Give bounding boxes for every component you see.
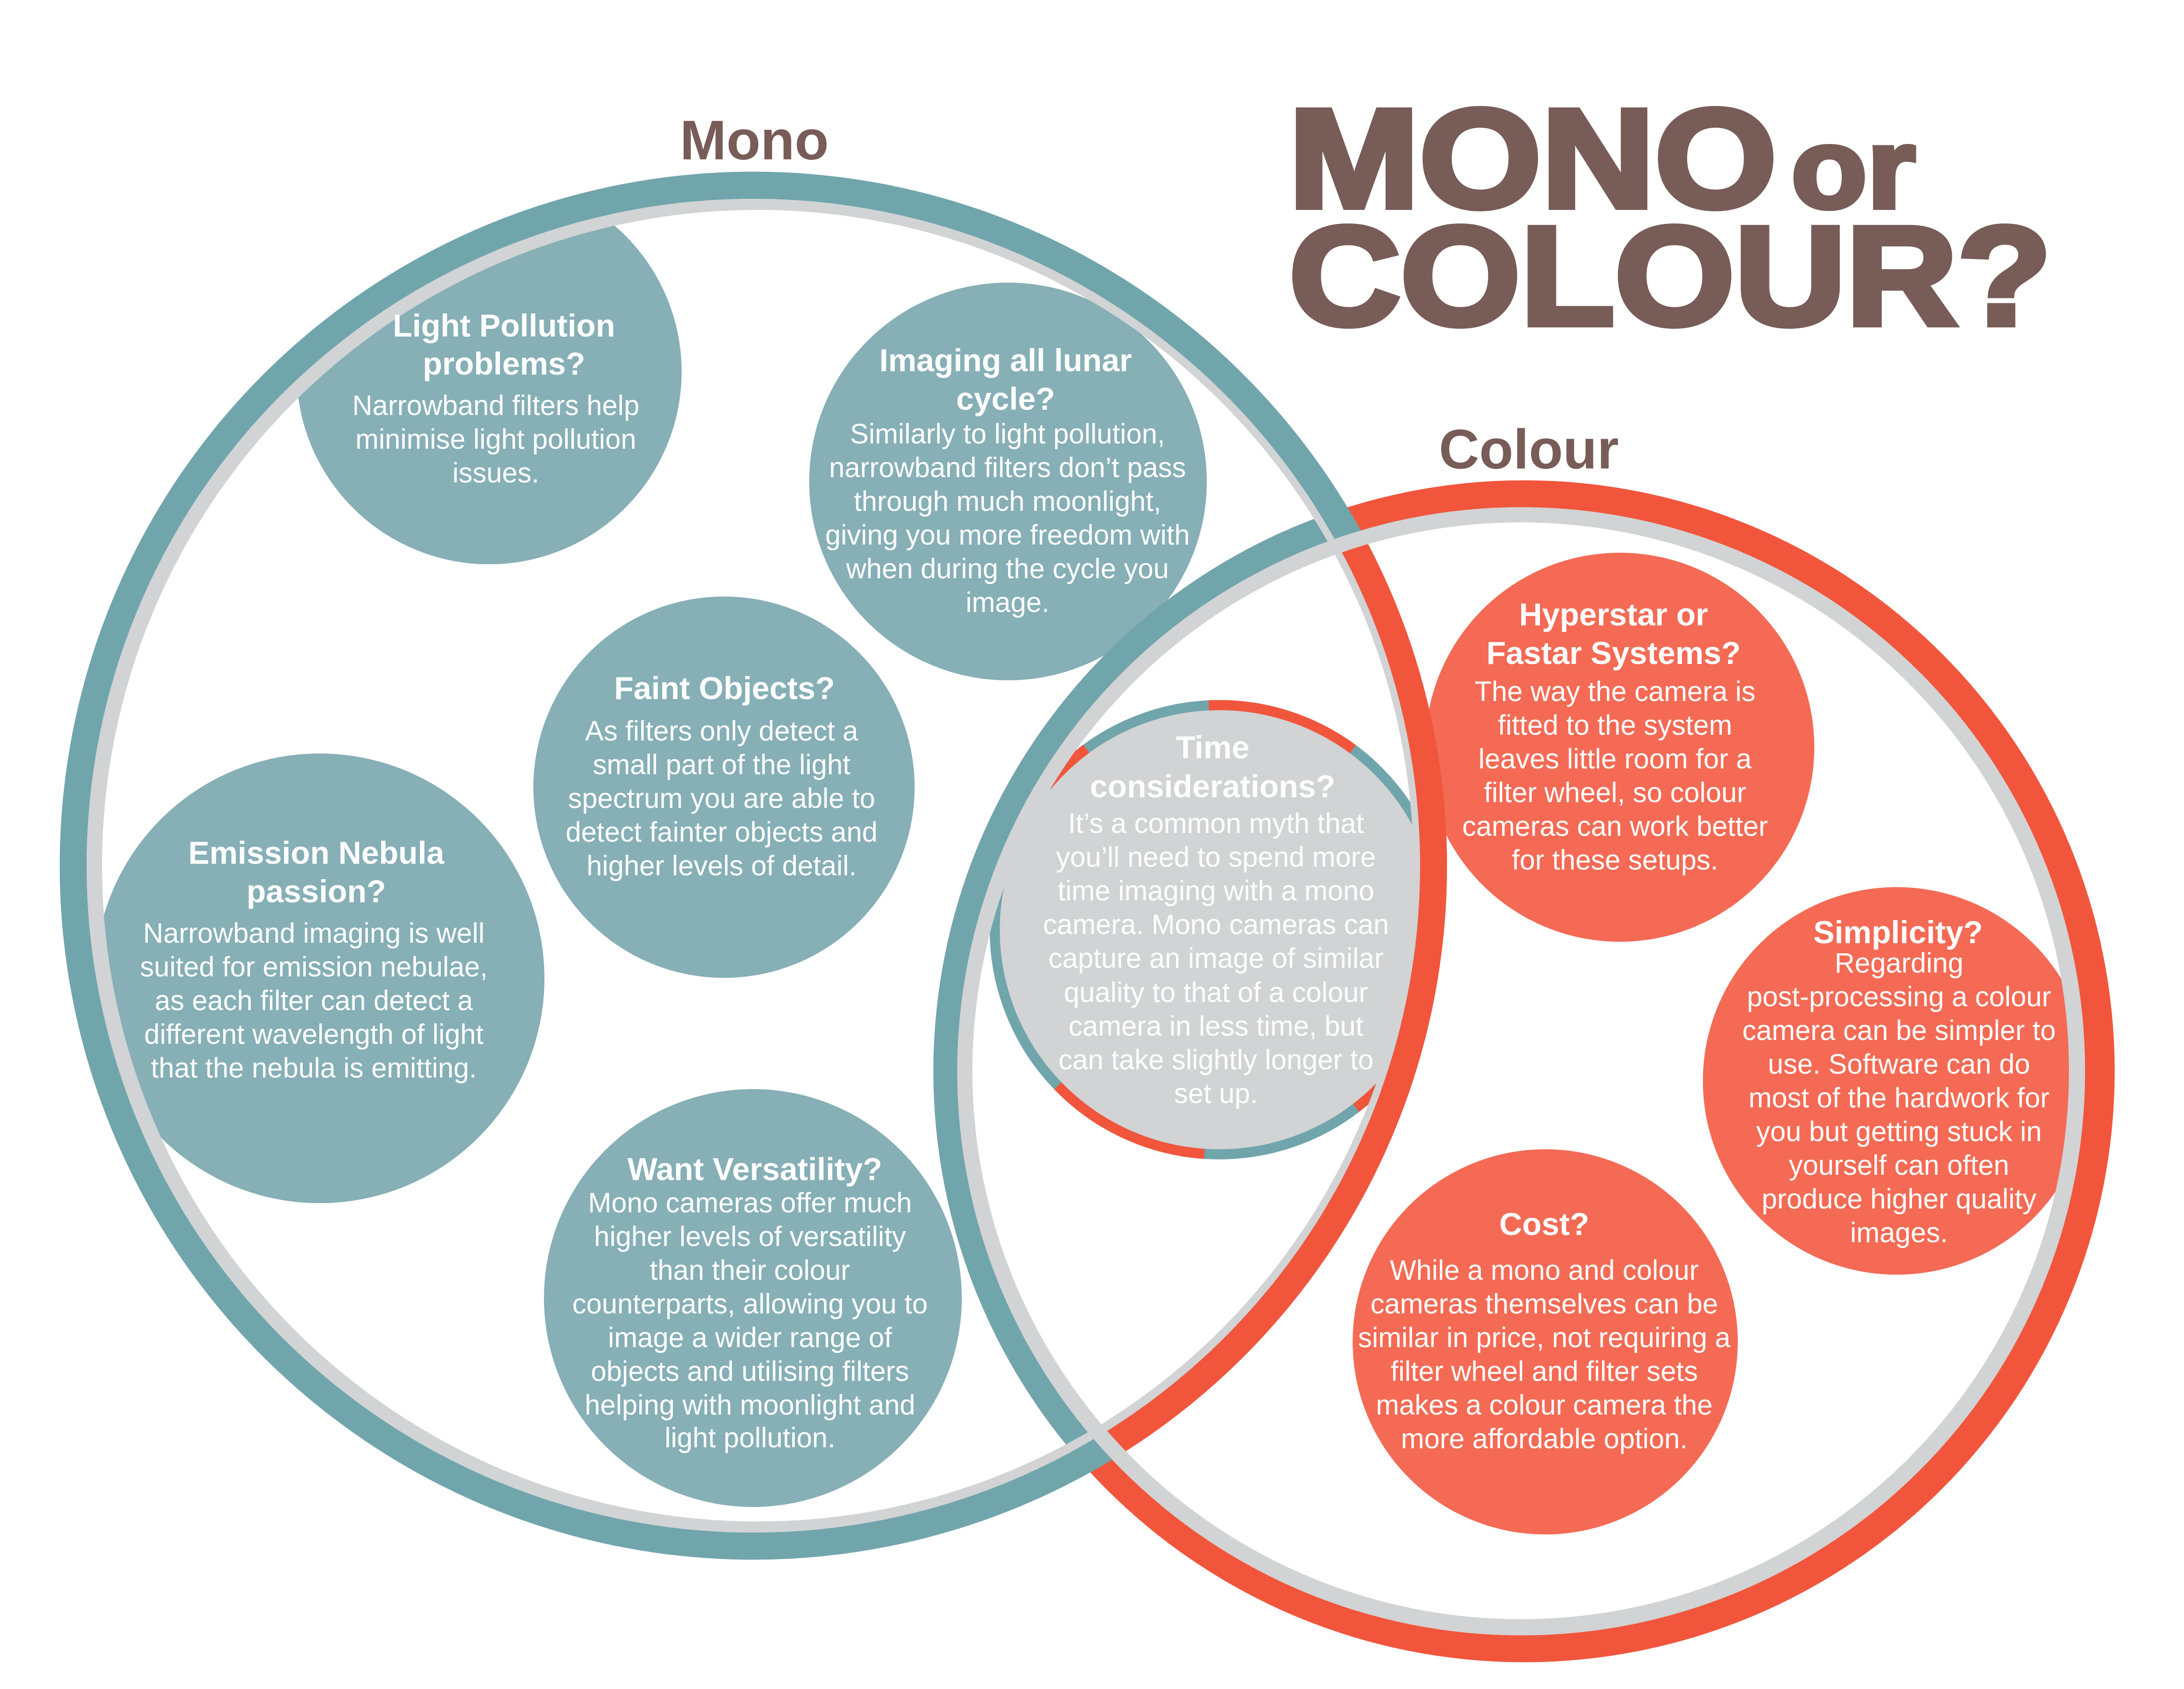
text: Simplicity: use. Software can do	[1768, 1049, 2030, 1080]
bubble: Emission Nebula	[95, 754, 544, 1203]
text: Simplicity: most of the hardwork for	[1748, 1082, 2050, 1114]
text: Cost	[1358, 1206, 1731, 1455]
text: Simplicity: produce higher quality	[1762, 1183, 2036, 1215]
text: Simplicity: yourself can often	[1789, 1150, 2009, 1181]
text: Want Versatility	[572, 1151, 928, 1454]
bubble: Faint Objects	[533, 597, 915, 978]
text: Light Pollution: problems?	[423, 346, 585, 381]
title	[1289, 80, 2052, 354]
venn ring: Colour	[933, 481, 2115, 1662]
inner grey ring: Mono	[87, 199, 1420, 1533]
text: Hyperstar or Fastar: for these setups.	[1512, 844, 1718, 876]
bubble: Simplicity	[1703, 887, 2090, 1275]
text: Light Pollution: minimise light pollution	[355, 424, 636, 455]
text: Cost: makes a colour camera the	[1376, 1390, 1713, 1421]
text: Want Versatility: light pollution.	[665, 1422, 835, 1454]
text: Faint Objects: higher levels of detail.	[586, 850, 857, 882]
text: Hyperstar or Fastar: cameras can work better	[1462, 811, 1768, 842]
text: Time considerations	[1043, 729, 1389, 1109]
text: Imaging all lunar cycle: through much moonlight,	[854, 486, 1161, 517]
text: Faint Objects: As filters only detect a	[585, 715, 858, 747]
text: Cost: cameras themselves can be	[1370, 1288, 1718, 1320]
text: Want Versatility: image a wider range of	[608, 1322, 892, 1353]
text: Want Versatility: objects and utilising filters	[591, 1356, 909, 1387]
text: Want Versatility: helping with moonlight and	[585, 1390, 915, 1421]
text: Cost: While a mono and colour	[1390, 1255, 1699, 1286]
bubble: Cost	[1353, 1149, 1738, 1534]
text: Faint Objects: small part of the light	[593, 749, 851, 780]
text: Time considerations: time imaging with a mono	[1058, 875, 1374, 907]
label: Mono: Mono	[680, 109, 829, 171]
bubble: Imaging all lunar cycle	[809, 283, 1207, 680]
title: MONO	[1289, 80, 1777, 237]
text: Simplicity: images.	[1850, 1217, 1948, 1248]
text: Simplicity	[1742, 914, 2056, 1248]
title: or	[1791, 105, 1915, 232]
text: Imaging all lunar cycle: cycle?	[956, 381, 1055, 416]
text: Imaging all lunar cycle: Imaging all lunar	[879, 342, 1132, 378]
text: Want Versatility: Mono cameras offer much	[588, 1187, 912, 1219]
text: Imaging all lunar cycle	[825, 342, 1190, 618]
text: Simplicity: Simplicity?	[1813, 914, 1983, 950]
text: Want Versatility: Want Versatility?	[627, 1151, 882, 1187]
text: Time considerations: capture an image of similar	[1048, 943, 1383, 974]
text: Hyperstar or Fastar: filter wheel, so colour	[1484, 777, 1746, 808]
text: Time considerations: Time	[1176, 729, 1249, 765]
text: Light Pollution	[352, 308, 639, 489]
overlap: Mono ring inside Colour turns red	[1094, 531, 1447, 1460]
text: Cost: Cost?	[1499, 1206, 1589, 1242]
text: Time considerations: can take slightly longer to	[1059, 1044, 1373, 1076]
text: Emission Nebula: Emission Nebula	[188, 835, 445, 870]
text: Emission Nebula: Narrowband imaging is well	[143, 918, 485, 949]
bubble: Want Versatility	[544, 1089, 962, 1507]
text: Time considerations: camera in less time, but	[1069, 1011, 1363, 1042]
text: Hyperstar or Fastar: The way the camera is	[1474, 676, 1756, 707]
text: Hyperstar or Fastar: Hyperstar or	[1519, 597, 1708, 632]
text: Cost: similar in price, not requiring a	[1358, 1322, 1731, 1353]
text: Imaging all lunar cycle: narrowband filters don’t pass	[829, 452, 1186, 483]
text: Simplicity: camera can be simpler to	[1742, 1015, 2056, 1046]
text: Time considerations: considerations?	[1090, 768, 1335, 804]
label: Colour: Colour	[1439, 418, 1619, 481]
bubble: Hyperstar or Fastar	[1425, 553, 1814, 942]
bubble: Time considerations with two-colour ring	[993, 703, 1446, 1156]
text: Time considerations: quality to that of a colour	[1064, 977, 1368, 1008]
text: Imaging all lunar cycle: image.	[966, 587, 1049, 618]
inner grey ring: Colour	[957, 507, 2085, 1635]
text: Cost: more affordable option.	[1401, 1423, 1688, 1455]
text: Simplicity: post-processing a colour	[1747, 981, 2051, 1013]
text: Faint Objects: Faint Objects?	[614, 670, 835, 706]
overlap: Colour ring inside Mono turns teal	[933, 509, 1360, 1452]
text: Light Pollution: Light Pollution	[393, 308, 615, 343]
text: Hyperstar or Fastar: fitted to the system	[1498, 710, 1732, 741]
text: Time considerations: It’s a common myth that	[1068, 808, 1364, 839]
text: Hyperstar or Fastar	[1462, 597, 1768, 876]
text: Imaging all lunar cycle: giving you more freedom with	[825, 520, 1190, 551]
text: Emission Nebula: that the nebula is emitting.	[151, 1052, 477, 1084]
text: Emission Nebula	[140, 835, 488, 1084]
venn ring: Mono	[60, 172, 1447, 1559]
text: Time considerations: you’ll need to spend more	[1056, 842, 1376, 873]
text: Want Versatility: than their colour	[650, 1255, 850, 1286]
text: Simplicity: you but getting stuck in	[1756, 1116, 2042, 1147]
text: Emission Nebula: suited for emission nebulae,	[140, 951, 488, 983]
text: Want Versatility: higher levels of versatility	[594, 1221, 906, 1252]
title: COLOUR?	[1289, 197, 2052, 354]
text: Light Pollution: issues.	[452, 457, 539, 489]
text: Want Versatility: counterparts, allowing you to	[572, 1288, 928, 1320]
text: Hyperstar or Fastar: leaves little room for a	[1478, 743, 1752, 775]
text: Cost: filter wheel and filter sets	[1391, 1356, 1698, 1387]
text: Emission Nebula: as each filter can detect a	[155, 985, 473, 1016]
text: Faint Objects	[566, 670, 878, 882]
text: Emission Nebula: different wavelength of light	[144, 1019, 484, 1050]
text: Faint Objects: spectrum you are able to	[568, 783, 875, 814]
text: Time considerations: set up.	[1174, 1078, 1258, 1109]
text: Simplicity: Regarding	[1835, 948, 1964, 979]
text: Imaging all lunar cycle: when during the cycle you	[846, 553, 1169, 585]
bubble: Light Pollution	[297, 179, 682, 564]
text: Faint Objects: detect fainter objects and	[566, 817, 878, 848]
text: Imaging all lunar cycle: Similarly to light pollution,	[850, 418, 1165, 450]
text: Time considerations: camera. Mono cameras can	[1043, 909, 1389, 940]
text: Emission Nebula: passion?	[246, 873, 386, 909]
text: Light Pollution: Narrowband filters help	[352, 390, 639, 421]
text: Hyperstar or Fastar: Fastar Systems?	[1486, 635, 1741, 671]
